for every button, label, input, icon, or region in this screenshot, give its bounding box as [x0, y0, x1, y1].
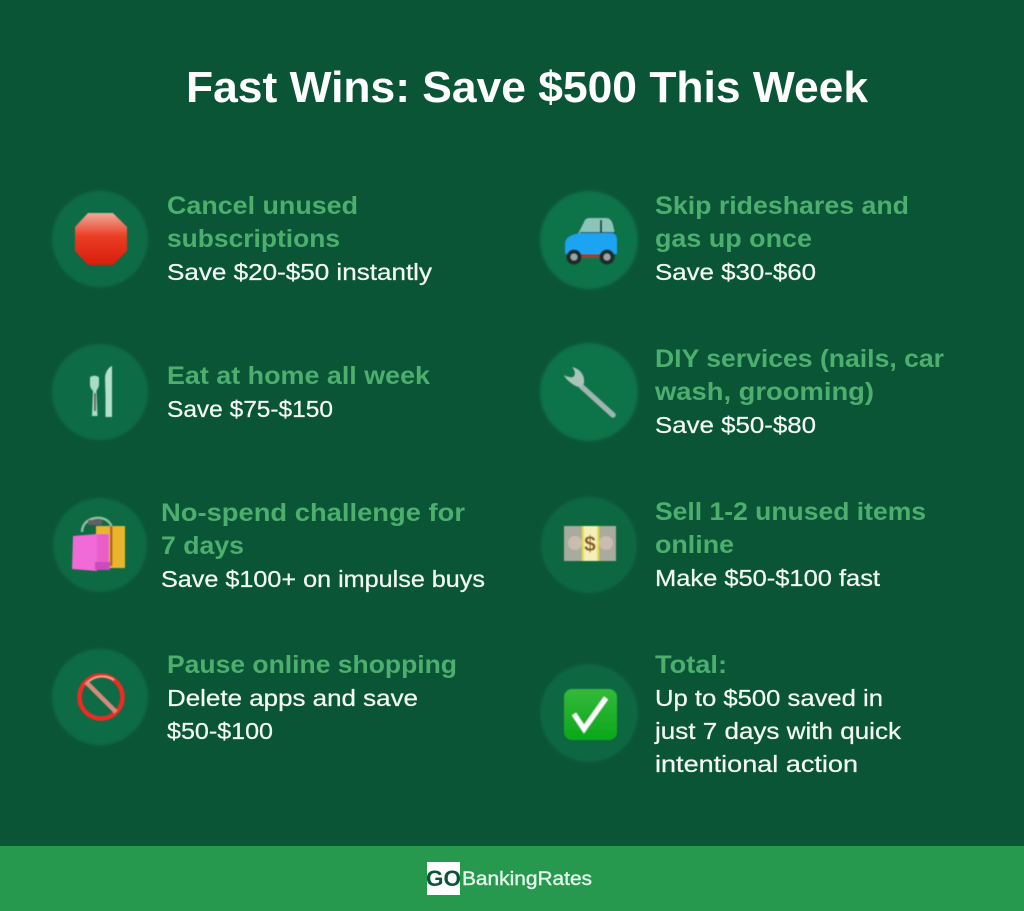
- item: no-spend challenge: [53, 498, 485, 592]
- text: cancel subscriptions: Cancel unused: [167, 192, 358, 220]
- text: total: Total:: [655, 651, 727, 679]
- text: DIY services: [654, 345, 944, 438]
- text: pause online shopping: [167, 651, 457, 744]
- icon: blue car: [540, 191, 638, 289]
- text: cancel subscriptions: [167, 192, 433, 285]
- item: skip rideshares: [540, 191, 909, 289]
- text: pause online shopping: Delete apps and save: [167, 685, 418, 711]
- text: cancel subscriptions: subscriptions: [167, 225, 340, 253]
- icon: shopping bags: [53, 498, 147, 592]
- icon: prohibited sign: [52, 649, 148, 745]
- title: Fast Wins: Save $500 This Week: [186, 63, 869, 112]
- text: eat at home: Save $75-$150: [167, 396, 333, 422]
- item: sell unused items: [541, 497, 926, 593]
- footer band: [0, 846, 1024, 911]
- logo: GOBankingRates: BankingRates: [462, 869, 592, 890]
- text: sell unused items: [655, 498, 926, 591]
- item: eat at home: [52, 344, 430, 440]
- text: sell unused items: online: [655, 531, 734, 559]
- icon: banknotes: [541, 497, 637, 593]
- icon: stop sign: [52, 191, 148, 287]
- text: total: just 7 days with quick: [654, 718, 902, 744]
- text: DIY services: DIY services (nails, car: [655, 345, 944, 373]
- text: total: intentional action: [655, 751, 858, 777]
- text: skip rideshares: gas up once: [655, 225, 812, 253]
- text: total: [654, 651, 902, 777]
- icon: check mark: [540, 664, 638, 762]
- text: DIY services: Save $50-$80: [655, 412, 816, 438]
- icon: fork and knife: [52, 344, 148, 440]
- text: no-spend challenge: No-spend challenge for: [161, 499, 465, 527]
- text: cancel subscriptions: Save $20-$50 instantly: [167, 259, 433, 285]
- text: sell unused items: Sell 1-2 unused items: [655, 498, 926, 526]
- icon: banknotes: $: [584, 533, 596, 556]
- text: no-spend challenge: Save $100+ on impulse buys: [161, 566, 485, 592]
- item: total: [540, 651, 902, 777]
- text: total: Up to $500 saved in: [655, 685, 883, 711]
- text: pause online shopping: $50-$100: [167, 718, 273, 744]
- text: skip rideshares: Save $30-$60: [655, 259, 816, 285]
- logo: GOBankingRates: GO: [426, 866, 461, 891]
- text: pause online shopping: Pause online shopping: [167, 651, 457, 679]
- text: no-spend challenge: [161, 499, 485, 592]
- text: DIY services: wash, grooming): [654, 378, 874, 406]
- text: skip rideshares: [655, 192, 909, 285]
- text: eat at home: [167, 362, 430, 422]
- text: sell unused items: Make $50-$100 fast: [655, 565, 881, 591]
- text: skip rideshares: Skip rideshares and: [655, 192, 909, 220]
- item: DIY services: [540, 343, 944, 441]
- logo: GOBankingRates: [426, 862, 592, 895]
- text: no-spend challenge: 7 days: [161, 532, 244, 560]
- text: eat at home: Eat at home all week: [167, 362, 430, 390]
- icon: wrench: [540, 343, 638, 441]
- item: cancel subscriptions: [52, 191, 433, 287]
- item: pause online shopping: [52, 649, 457, 745]
